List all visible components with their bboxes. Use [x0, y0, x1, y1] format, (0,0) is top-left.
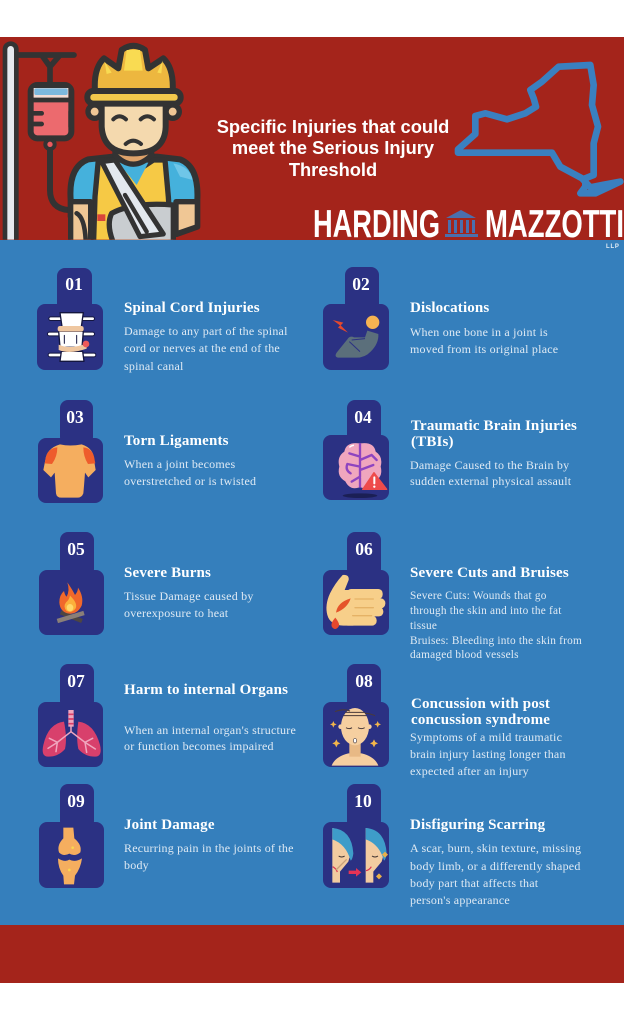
icon: New York State outline [458, 65, 620, 193]
panel: item 02: 02 [352, 274, 370, 294]
panel: item 02 [323, 267, 558, 370]
text block: through the skin and into the fat [410, 605, 562, 617]
text block: A scar, burn, skin texture, missing [410, 841, 581, 855]
heading: Concussion with post [411, 696, 550, 712]
panel: item 05 [39, 532, 254, 635]
panel: item 10: 10 [354, 791, 372, 811]
text block [124, 324, 288, 373]
panel: item 07: 07 [67, 671, 85, 691]
panel: item 10 [323, 784, 581, 907]
text block: body limb, or a differently shaped [410, 859, 581, 873]
text block: tissue [410, 620, 437, 632]
icon: brain with warning [339, 443, 387, 498]
icon: torso with sore shoulders [43, 444, 96, 498]
heading: (TBIs) [411, 434, 454, 450]
icon: injured worker with IV drip [11, 46, 197, 250]
icon: courthouse [445, 210, 478, 237]
logo: Harding Mazzotti: HARDING [313, 203, 440, 246]
text block: Recurring pain in the joints of the [124, 841, 294, 855]
text block: overstretched or is twisted [124, 474, 256, 488]
title: Specific Injuries that could [217, 116, 449, 137]
text block: Tissue Damage caused by [124, 589, 254, 603]
text block: overexposure to heat [124, 606, 229, 620]
icon: campfire [57, 582, 84, 621]
text block: Severe Cuts: Wounds that go [410, 590, 547, 602]
heading [411, 418, 577, 450]
text block: Bruises: Bleeding into the skin from [410, 635, 582, 647]
text block: cord or nerves at the end of the [124, 341, 280, 355]
text block [410, 730, 566, 778]
text block: expected after an injury [410, 764, 529, 778]
text block [124, 723, 296, 753]
text block: Damage to any part of the spinal [124, 324, 288, 338]
panel: item 04 [323, 400, 577, 500]
text block: body part that affects that [410, 876, 539, 890]
panel: item 04: 04 [354, 407, 372, 427]
title: meet the Serious Injury [232, 137, 435, 158]
text block: spinal canal [124, 359, 184, 373]
text block [124, 841, 294, 872]
icon: dislocated shoulder figure [333, 316, 379, 358]
heading: concussion syndrome [411, 712, 550, 728]
text block: damaged blood vessels [410, 649, 519, 661]
panel: item 05: 05 [67, 539, 85, 559]
heading [411, 696, 550, 728]
text block: person's appearance [410, 893, 510, 907]
panel: item 06 [323, 532, 582, 661]
panel: item 06: 06 [355, 539, 373, 559]
text block: When a joint becomes [124, 457, 235, 471]
heading: Severe Cuts and Bruises [410, 565, 569, 581]
logo: Harding Mazzotti [313, 203, 624, 250]
title [217, 116, 449, 180]
panel: header band [0, 37, 624, 240]
text block: When one bone in a joint is [410, 325, 548, 339]
text block: Damage Caused to the Brain by [410, 458, 569, 472]
icon: knee joint [58, 828, 82, 884]
panel: item 08 [323, 664, 566, 778]
text block [124, 457, 256, 488]
text block [410, 458, 572, 488]
heading: Disfiguring Scarring [410, 817, 546, 833]
heading: Spinal Cord Injuries [124, 300, 260, 316]
text block: sudden external physical assault [410, 474, 572, 488]
text block [410, 841, 581, 907]
text block: or function becomes impaired [124, 739, 274, 753]
panel: item 01 [37, 268, 288, 373]
heading: Dislocations [410, 300, 489, 316]
panel: item 08: 08 [355, 671, 373, 691]
heading: Traumatic Brain Injuries [411, 418, 577, 434]
panel: footer band [0, 925, 624, 983]
title: Threshold [289, 159, 377, 180]
panel: item 09 [39, 784, 294, 888]
icon: dazed head with stars [330, 708, 381, 766]
panel: item 03: 03 [66, 407, 84, 427]
panel: injuries background [0, 240, 624, 925]
text block: moved from its original place [410, 342, 558, 356]
heading: Harm to internal Organs [124, 682, 288, 698]
panel: item 03 [38, 400, 256, 503]
text block [410, 590, 582, 661]
panel: item 01: 01 [65, 274, 83, 294]
icon: before and after faces [332, 828, 388, 883]
panel: item 07 [38, 664, 296, 767]
panel: item 09: 09 [67, 791, 85, 811]
text block: brain injury lasting longer than [410, 747, 566, 761]
heading: Torn Ligaments [124, 433, 229, 449]
text block [124, 589, 254, 620]
text block: body [124, 858, 149, 872]
logo: Harding Mazzotti: LLP [606, 244, 620, 250]
icon: cut hand [326, 575, 385, 629]
icon: spine [49, 313, 94, 361]
text block: When an internal organ's structure [124, 723, 296, 737]
heading: Joint Damage [124, 817, 215, 833]
heading: Severe Burns [124, 565, 211, 581]
icon: lungs [43, 710, 101, 757]
text block: Symptoms of a mild traumatic [410, 730, 562, 744]
text block [410, 325, 558, 356]
